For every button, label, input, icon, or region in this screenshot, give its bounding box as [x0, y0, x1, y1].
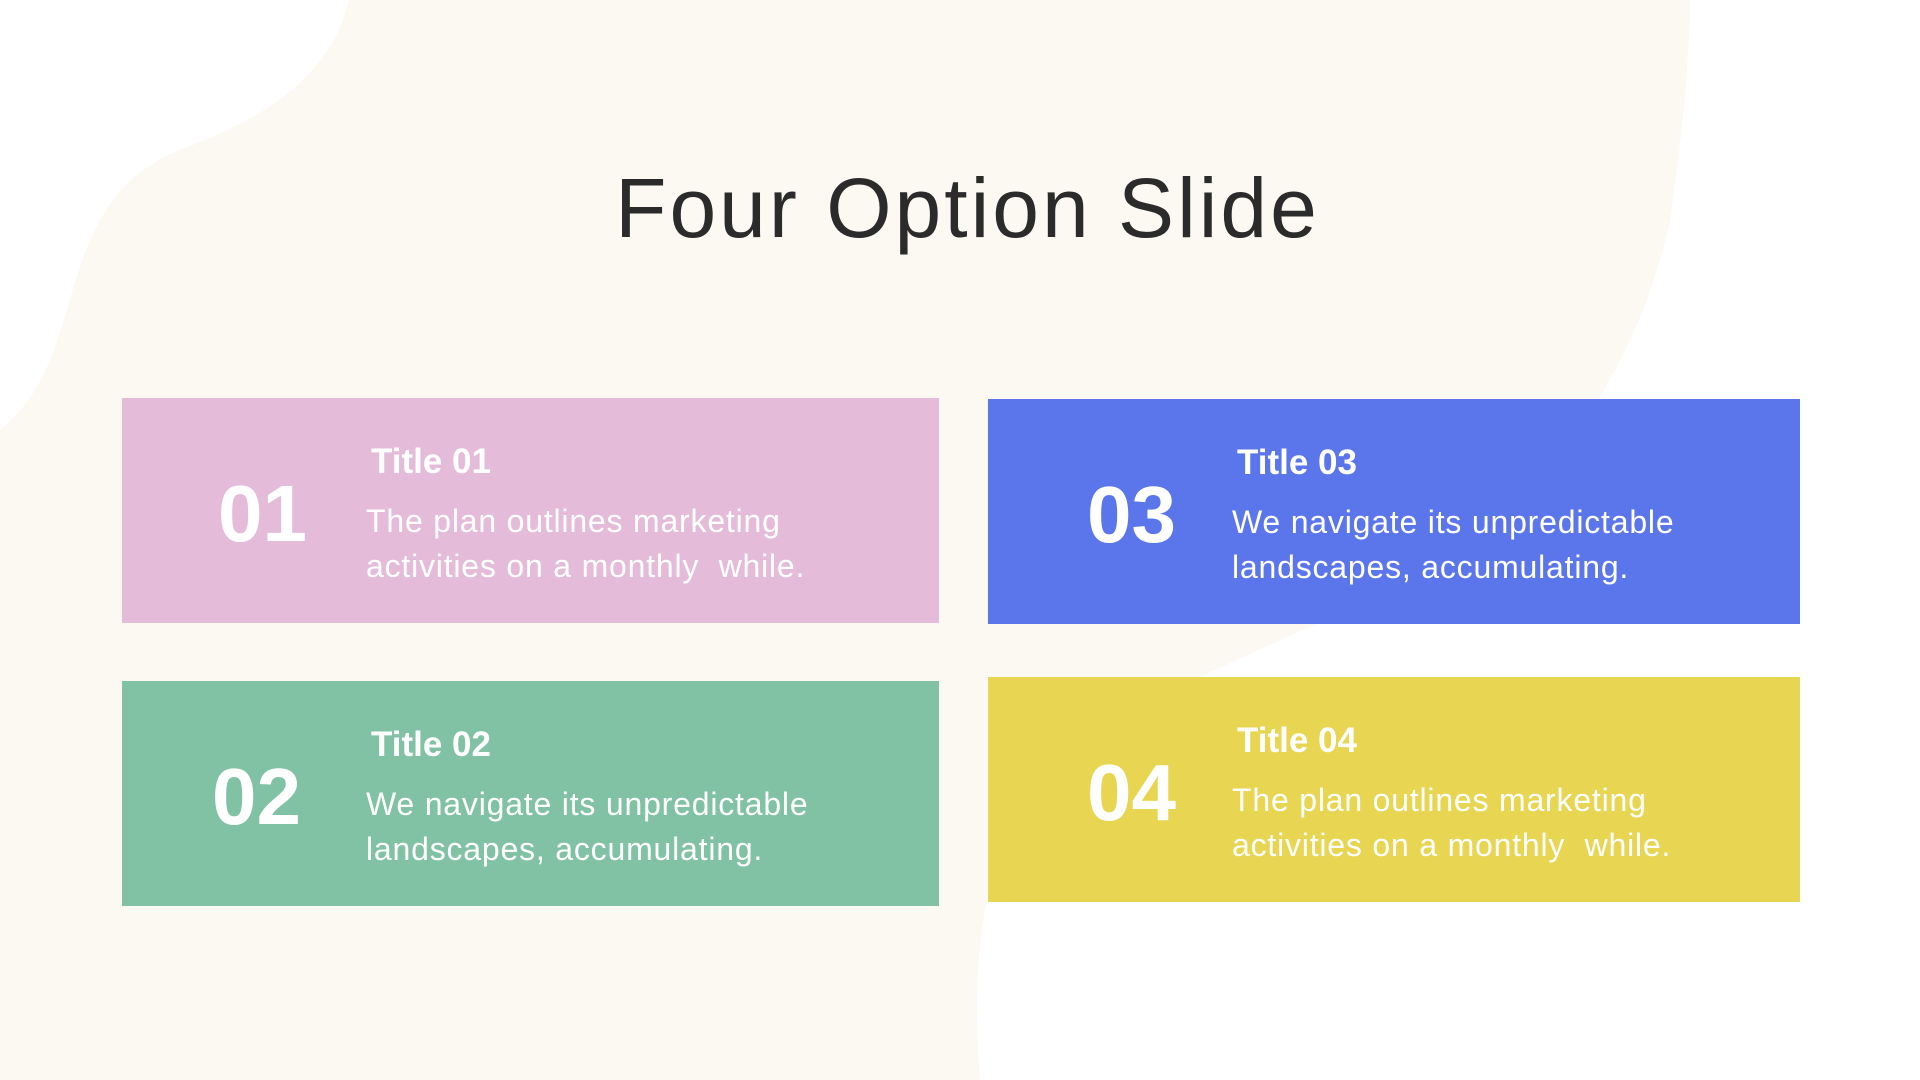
panel: option 03 [988, 399, 1800, 624]
text 04: The plan outlines marketing [1232, 782, 1647, 818]
text 03: We navigate its unpredictable [1232, 504, 1674, 540]
heading 01: Title 01 [371, 442, 491, 481]
text 01 [366, 503, 805, 584]
panel: option 04 [988, 677, 1800, 902]
text 02: landscapes, accumulating. [366, 831, 763, 867]
heading 02: Title 02 [371, 725, 491, 764]
text 01: activities on a monthly while. [366, 548, 805, 584]
heading 03: Title 03 [1237, 443, 1357, 482]
number 01: 01 [218, 469, 307, 558]
panel: option 02 [122, 681, 939, 906]
title: Four Option Slide [615, 161, 1320, 255]
panel: option 01 [122, 398, 939, 623]
text 03 [1232, 504, 1674, 585]
text 04: activities on a monthly while. [1232, 827, 1671, 863]
text 03: landscapes, accumulating. [1232, 549, 1629, 585]
text 02: We navigate its unpredictable [366, 786, 808, 822]
text 02 [366, 786, 808, 867]
heading 04: Title 04 [1237, 721, 1357, 760]
text 01: The plan outlines marketing [366, 503, 781, 539]
number 03: 03 [1087, 470, 1176, 559]
text 04 [1232, 782, 1671, 863]
number 04: 04 [1087, 748, 1176, 837]
number 02: 02 [212, 752, 301, 841]
